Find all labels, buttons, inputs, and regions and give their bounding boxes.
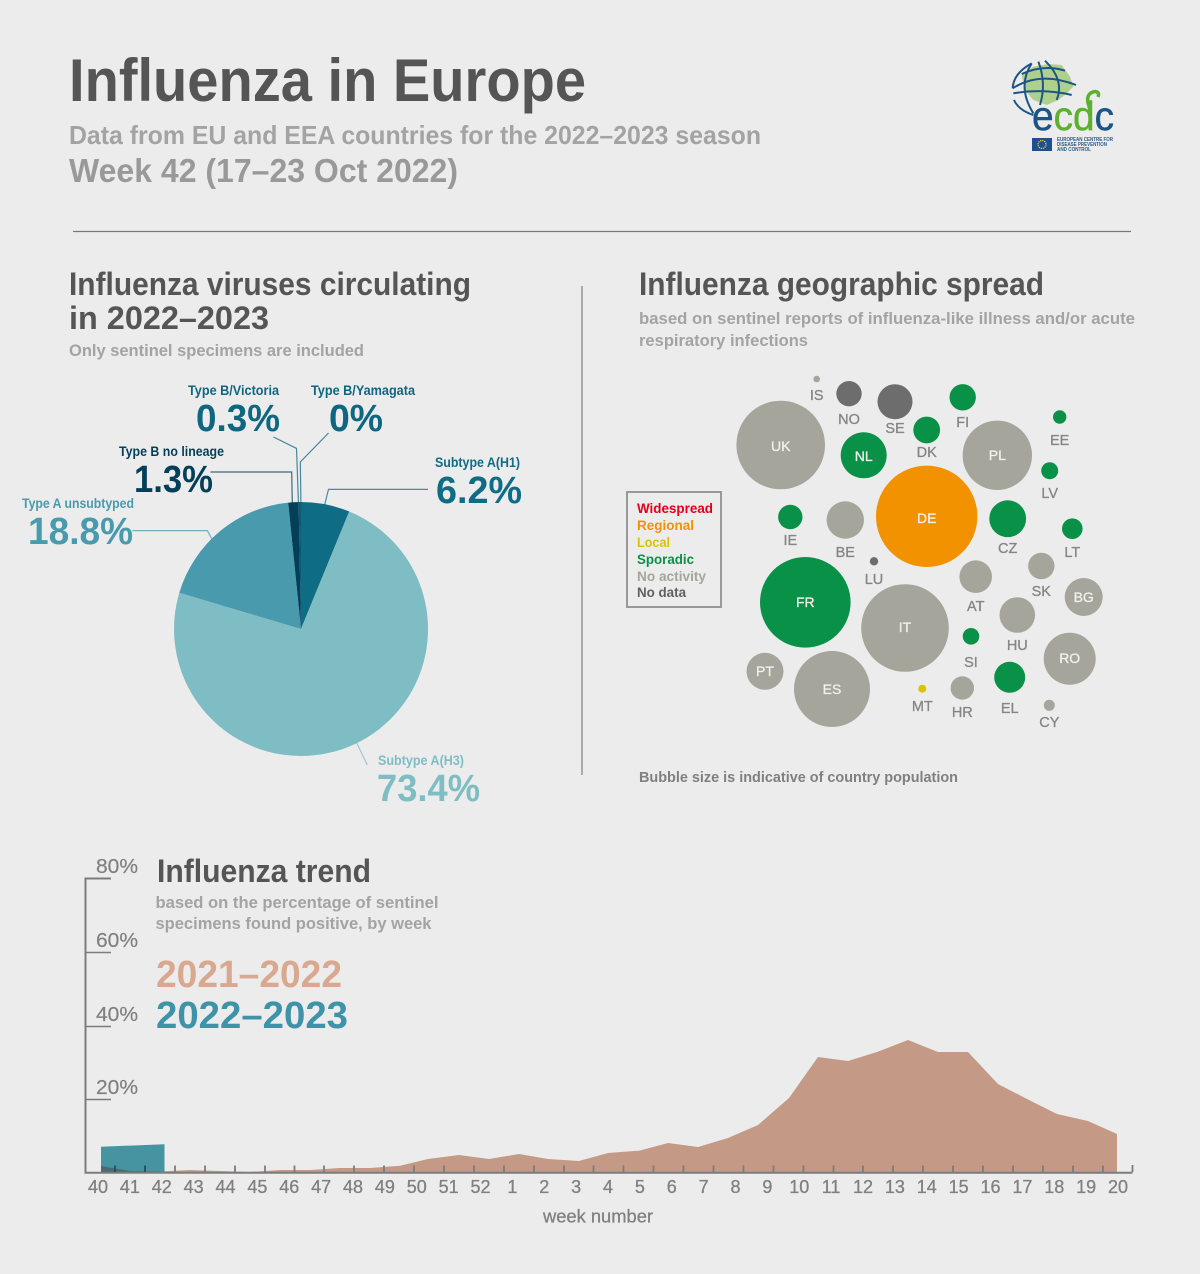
- panel: geographic spread: [627, 266, 1135, 786]
- bubble: EL: EL: [1001, 701, 1019, 717]
- bubble: NL: NL: [855, 448, 873, 464]
- bubble: LV: LV: [1041, 486, 1058, 502]
- area chart: 2021-2022: [101, 1040, 1117, 1172]
- legend: seasons: [156, 954, 348, 1037]
- label: Type B/Victoria: 0.3%: [196, 398, 280, 440]
- label: Type B no lineage: 1.3%: [134, 459, 213, 501]
- x axis labels: 8: [730, 1177, 741, 1197]
- axes: [85, 878, 1132, 1173]
- legend: Widespread: [637, 500, 713, 516]
- bubble: LU: LU: [865, 572, 883, 588]
- panel: influenza trend: [85, 853, 1132, 1226]
- bubble: BE: [827, 501, 864, 561]
- x axis labels: 18: [1044, 1177, 1064, 1197]
- bubble: UK: [736, 401, 825, 489]
- x axis labels: 9: [762, 1177, 772, 1197]
- bubble: CY: CY: [1039, 715, 1060, 731]
- logo wordmark: ecdc: [1032, 93, 1114, 139]
- bubble: IT: IT: [899, 619, 912, 635]
- bubble chart: [736, 376, 1103, 731]
- bubble: SE: [878, 384, 912, 437]
- x axis labels: 5: [635, 1177, 645, 1197]
- description: respiratory infections: [639, 331, 808, 350]
- x axis labels: 16: [980, 1177, 1001, 1197]
- x axis labels: 46: [279, 1177, 299, 1197]
- bubble: SE: SE: [885, 421, 905, 437]
- heading: [69, 266, 471, 336]
- bubble: PL: [963, 421, 1032, 490]
- description: [639, 309, 1135, 350]
- x axis labels: 13: [885, 1177, 905, 1197]
- heading: Influenza trend: [157, 853, 371, 889]
- bubble: NO: NO: [838, 412, 860, 428]
- bubble: LT: LT: [1064, 545, 1080, 561]
- bubble: ES: [794, 651, 870, 727]
- legend: Regional: [637, 517, 694, 533]
- x axis labels: 48: [343, 1177, 363, 1197]
- legend: No activity: [637, 568, 706, 584]
- bubble: DK: DK: [917, 445, 937, 461]
- bubble: HR: [951, 676, 974, 721]
- x axis labels: 19: [1076, 1177, 1096, 1197]
- bubble: BG: [1065, 578, 1103, 616]
- panel: viruses circulating: [22, 266, 522, 810]
- pie chart: [174, 502, 428, 756]
- x axis labels: 17: [1012, 1177, 1032, 1197]
- bubble: FI: FI: [956, 415, 969, 431]
- description: based on the percentage of sentinel: [156, 893, 438, 912]
- bubble: NO: [836, 381, 862, 428]
- bubble: DE: [876, 466, 977, 567]
- x axis labels: 10: [789, 1177, 809, 1197]
- label: Type B/Victoria: [188, 383, 280, 440]
- note: Only sentinel specimens are included: [69, 341, 364, 360]
- label: Subtype A(H1): Subtype A(H1): [435, 455, 520, 470]
- label: Type B/Yamagata: [311, 383, 415, 440]
- x axis labels: 50: [407, 1177, 427, 1197]
- x axis labels: 7: [699, 1177, 709, 1197]
- bubble: HU: [1000, 597, 1035, 654]
- y axis labels: [96, 856, 138, 1099]
- x axis labels: 45: [247, 1177, 267, 1197]
- label: Type B/Victoria: Type B/Victoria: [188, 383, 279, 398]
- x axis labels: 15: [949, 1177, 969, 1197]
- label: Type B/Yamagata: 0%: [329, 398, 383, 440]
- label: Type B no lineage: [119, 444, 224, 501]
- bubble: SI: SI: [964, 655, 978, 671]
- legend: No data: [637, 584, 686, 600]
- bubble: CZ: [989, 500, 1026, 557]
- bubble: PL: PL: [989, 447, 1006, 463]
- bubble: FR: [760, 557, 851, 648]
- description: based on sentinel reports of influenza-like illness and/or acute: [639, 309, 1135, 328]
- bubble: EL: [994, 662, 1025, 717]
- x axis labels: 4: [603, 1177, 613, 1197]
- bubble: IE: IE: [783, 533, 797, 549]
- header: [69, 47, 761, 189]
- footnote: Bubble size is indicative of country population: [639, 769, 958, 786]
- bubble: SI: [963, 628, 979, 671]
- bubble: FI: [950, 384, 976, 431]
- label: Type B no lineage: Type B no lineage: [119, 444, 224, 459]
- logo caption: DISEASE PREVENTION: [1057, 142, 1107, 148]
- legend: [627, 492, 721, 607]
- x axis labels: 41: [120, 1177, 140, 1197]
- x axis labels: 44: [215, 1177, 236, 1197]
- bubble: DK: [913, 417, 940, 461]
- x axis labels: 40: [88, 1177, 108, 1197]
- icon: globe: [1013, 61, 1076, 115]
- logo caption: [1057, 137, 1113, 153]
- x axis labels: 20: [1108, 1177, 1128, 1197]
- legend: Local: [637, 534, 670, 550]
- bubble: RO: [1044, 633, 1096, 685]
- x axis labels: 52: [470, 1177, 491, 1197]
- label: Subtype A(H3): 73.4%: [377, 768, 480, 810]
- bubble: IE: [778, 505, 802, 549]
- bubble: IS: IS: [810, 388, 824, 404]
- legend: seasons: 2022–2023: [156, 995, 348, 1037]
- description: specimens found positive, by week: [156, 914, 432, 933]
- subtitle: data source: Data from EU and EEA countries for the 2022–2023 season: [69, 120, 761, 150]
- x axis labels: 47: [311, 1177, 331, 1197]
- bubble: NL: [841, 432, 887, 478]
- bubble: SK: [1028, 553, 1055, 600]
- bubble: RO: RO: [1059, 650, 1080, 666]
- y axis labels: 80%: [96, 856, 138, 878]
- area chart: 2022-2023: [101, 1144, 164, 1172]
- bubble: BE: BE: [836, 545, 855, 561]
- bubble: AT: [959, 560, 992, 615]
- heading: in 2022–2023: [69, 300, 269, 336]
- leader lines: [132, 433, 428, 765]
- label: Type A unsubtyped: 18.8%: [28, 511, 133, 553]
- icon: sprout swirl: [1088, 92, 1099, 116]
- bubble: ES: ES: [823, 681, 841, 697]
- title: Influenza in Europe: [69, 47, 586, 114]
- x axis labels: [88, 1177, 1128, 1197]
- bubble: LV: [1041, 462, 1058, 502]
- x axis title: week number: [542, 1206, 653, 1226]
- x axis labels: 6: [667, 1177, 677, 1197]
- bubble: BG: BG: [1074, 589, 1094, 605]
- label: Type A unsubtyped: Type A unsubtyped: [22, 496, 134, 511]
- bubble: CY: [1039, 700, 1060, 731]
- icon: EU flag: [1032, 138, 1052, 151]
- x axis labels: 49: [375, 1177, 395, 1197]
- bubble: PT: [746, 653, 784, 690]
- description: [156, 893, 438, 933]
- bubble: LU: [865, 557, 883, 588]
- label: Subtype A(H1): 6.2%: [436, 470, 522, 512]
- x axis labels: 11: [822, 1177, 840, 1197]
- subtitle: week: Week 42 (17–23 Oct 2022): [69, 152, 458, 189]
- logo: ECDC: [1013, 61, 1114, 153]
- bubble: IS: [810, 376, 824, 404]
- y axis labels: 20%: [96, 1077, 138, 1099]
- bubble: LT: [1062, 518, 1083, 561]
- logo caption: EUROPEAN CENTRE FOR: [1057, 137, 1113, 143]
- bubble: EE: EE: [1050, 433, 1070, 449]
- bubble: MT: MT: [912, 699, 933, 715]
- bubble: IT: [861, 584, 949, 672]
- legend: Sporadic: [637, 551, 694, 567]
- x axis labels: 2: [539, 1177, 549, 1197]
- x axis labels: 51: [439, 1177, 459, 1197]
- legend: seasons: 2021–2022: [156, 954, 342, 996]
- heading: Influenza viruses circulating: [69, 266, 471, 302]
- bubble: HR: HR: [952, 705, 973, 721]
- bubble: HU: HU: [1007, 638, 1028, 654]
- bubble: SK: SK: [1032, 584, 1051, 600]
- bubble: CZ: CZ: [998, 541, 1017, 557]
- x axis labels: 3: [571, 1177, 581, 1197]
- y axis labels: 60%: [96, 930, 138, 952]
- x axis labels: 1: [507, 1177, 517, 1197]
- x axis labels: 42: [152, 1177, 172, 1197]
- x axis labels: 43: [184, 1177, 204, 1197]
- bubble: PT: PT: [756, 663, 774, 679]
- bubble: UK: UK: [771, 438, 791, 454]
- bubble: FR: FR: [796, 594, 815, 610]
- logo caption: AND CONTROL: [1057, 147, 1091, 153]
- bubble: MT: [912, 685, 933, 715]
- y axis labels: 40%: [96, 1004, 138, 1026]
- heading: Influenza geographic spread: [639, 266, 1044, 302]
- bubble: EE: [1050, 410, 1070, 449]
- label: Subtype A(H3): Subtype A(H3): [378, 753, 464, 768]
- x axis labels: 12: [853, 1177, 873, 1197]
- label: Type A unsubtyped: [22, 496, 134, 553]
- bubble: AT: AT: [967, 599, 985, 615]
- bubble: DE: DE: [917, 510, 936, 526]
- x axis labels: 14: [917, 1177, 937, 1197]
- label: Type B/Yamagata: Type B/Yamagata: [311, 383, 415, 398]
